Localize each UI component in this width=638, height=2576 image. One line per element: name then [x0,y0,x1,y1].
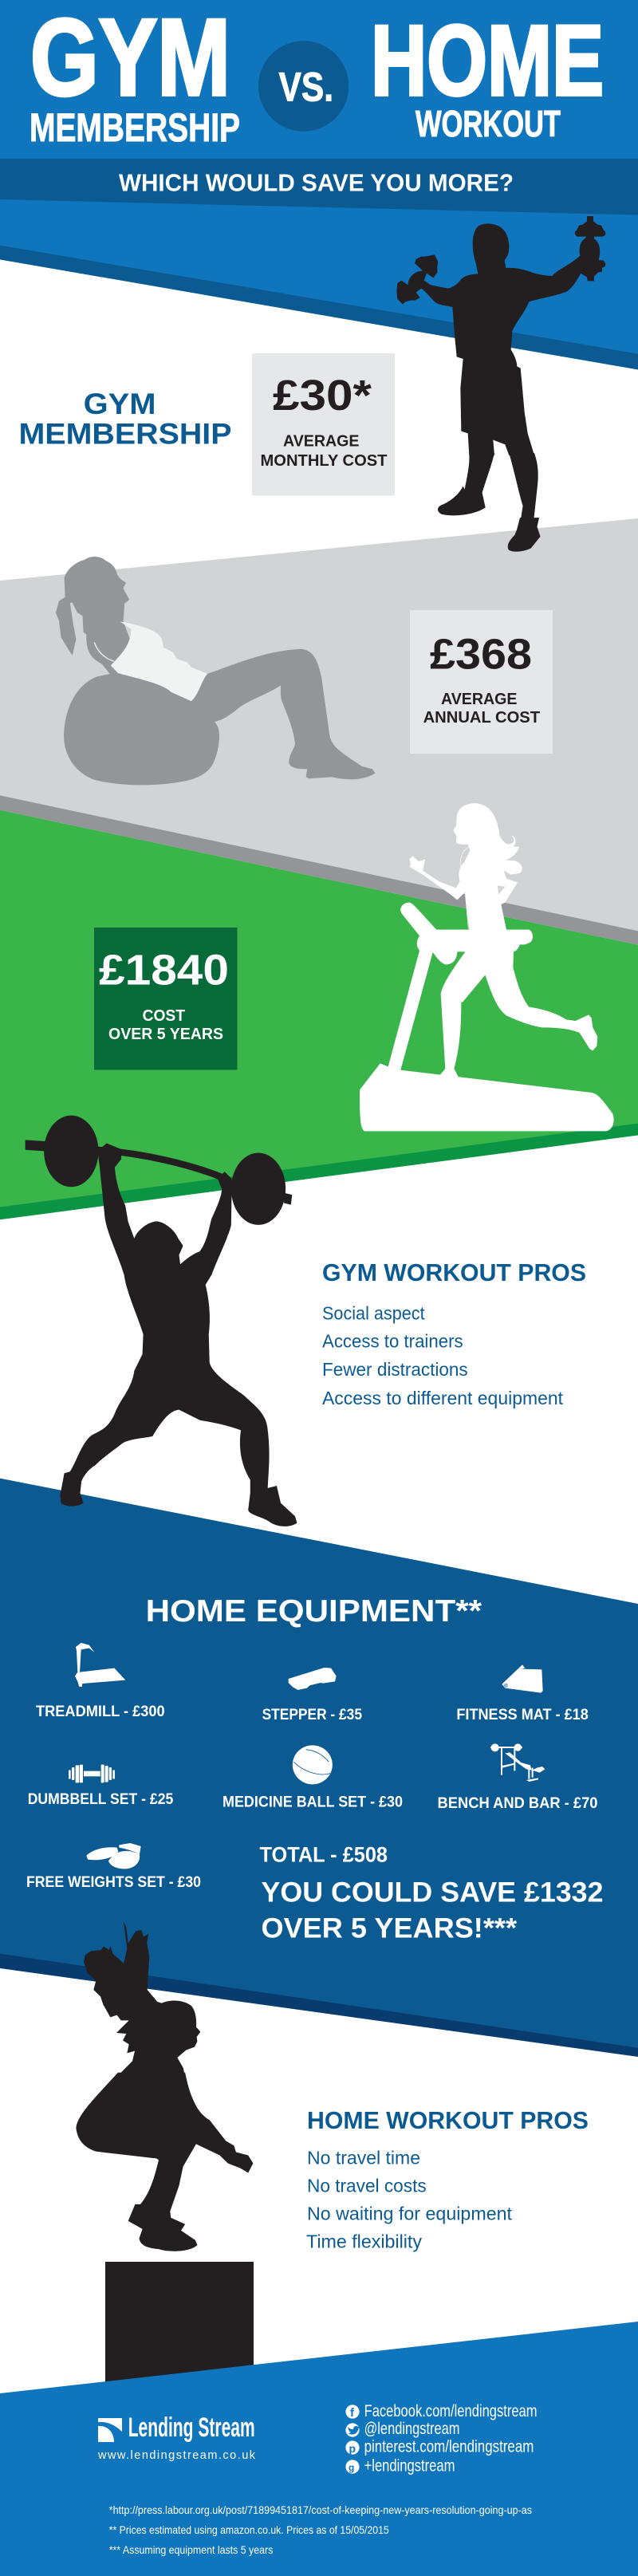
footnotes: *http://press.labour.org.uk/post/71899451817/cost-of-keeping-new-years-resolution-going-up-as [109,2503,532,2516]
heading word: MEMBERSHIP: MEMBERSHIP [30,105,240,150]
text block: home workout pros: Time flexibility [306,2231,423,2252]
logo: Lending Stream: Lending Stream [128,2413,255,2443]
stat box: five year cost [94,928,238,1070]
logo mark [98,2418,122,2442]
silhouette: woman on exercise ball [56,557,375,785]
equipment labels: MEDICINE BALL SET - £30 [223,1794,403,1810]
text block: gym workout pros: Fewer distractions [322,1359,468,1380]
heading: gym membership: MEMBERSHIP [19,416,231,450]
text block: gym workout pros: Social aspect [322,1303,425,1324]
background: navy equipment section [0,1479,638,2057]
logo: Lending Stream: www.lendingstream.co.uk [97,2449,256,2462]
text block: gym workout pros [322,1259,586,1408]
text block: home workout pros: No waiting for equipment [307,2204,513,2224]
icon: medicine ball [293,1745,333,1784]
text block: gym workout pros: GYM WORKOUT PROS [322,1259,586,1286]
jump box [105,2262,254,2389]
heading word: WORKOUT: WORKOUT [415,103,561,144]
heading: home equipment: HOME EQUIPMENT** [146,1594,482,1629]
social: facebook: Facebook.com/lendingstream [364,2402,538,2420]
icon: bench and bar [490,1743,545,1782]
stat box: monthly cost: AVERAGE [283,433,359,451]
icon: free weights set [86,1843,141,1869]
equipment labels [26,1704,598,1891]
equipment labels: STEPPER - £35 [262,1707,362,1723]
social: google plus: +lendingstream [364,2457,455,2476]
logo: Lending Stream [97,2413,256,2462]
heading: gym membership: GYM [84,387,156,420]
stat box: monthly cost: MONTHLY COST [260,452,388,470]
silhouette: man lifting dumbbells [396,216,605,552]
equipment labels: FITNESS MAT - £18 [456,1707,589,1723]
savings callout [260,1843,603,1944]
equipment labels: TREADMILL - £300 [36,1704,165,1720]
background: green section [0,810,638,1219]
social: google plus [345,2457,455,2476]
stat box: five year cost: OVER 5 YEARS [108,1026,223,1043]
background: top blue section [0,0,638,606]
icon: stepper [289,1668,337,1690]
stat box: annual cost: AVERAGE [441,691,517,708]
treadmill frame [360,903,614,1131]
background: grey section [0,518,638,945]
heading word: GYM: GYM [30,0,230,119]
text block: gym workout pros: Access to trainers [322,1331,463,1352]
equipment labels: BENCH AND BAR - £70 [437,1795,598,1812]
social: google plus: g [349,2462,354,2473]
savings callout: OVER 5 YEARS!*** [262,1913,517,1944]
social: facebook: f [350,2406,355,2420]
text block: home workout pros [306,2107,589,2252]
text block: home workout pros: No travel time [307,2148,420,2168]
social links [345,2402,538,2476]
social: twitter: @lendingstream [364,2420,459,2438]
savings callout: YOU COULD SAVE £1332 [262,1877,603,1908]
stat box: annual cost: ANNUAL COST [423,709,540,727]
equipment labels: FREE WEIGHTS SET - £30 [26,1874,201,1891]
footnotes [109,2503,532,2556]
social: pinterest: p [349,2442,356,2455]
text block: gym workout pros: Access to different equipment [322,1388,564,1408]
social: pinterest: pinterest.com/lendingstream [364,2437,534,2456]
icon: treadmill [75,1643,125,1687]
stat box: annual cost [410,610,553,754]
icon: dumbbell set [69,1765,115,1782]
equipment icons [69,1643,545,1869]
silhouette: man lifting barbell [26,1116,297,1526]
savings callout: TOTAL - £508 [260,1843,388,1867]
vs badge [258,41,349,132]
stat box: annual cost: £368 [430,631,532,679]
footnotes: *** Assuming equipment lasts 5 years [109,2543,273,2556]
heading: gym membership [19,387,231,450]
silhouette: woman box jumping [76,1921,253,2251]
vs badge: VS. [279,64,333,110]
stat box: monthly cost [252,353,395,496]
equipment labels: DUMBBELL SET - £25 [28,1791,174,1808]
stat box: five year cost: COST [143,1007,185,1025]
text block: home workout pros: HOME WORKOUT PROS [307,2107,589,2134]
icon: fitness mat [502,1664,543,1693]
social: twitter [345,2420,459,2438]
stat box: five year cost: £1840 [99,947,229,995]
footnotes: ** Prices estimated using amazon.co.uk. Prices as of 15/05/2015 [109,2523,389,2536]
stat box: monthly cost: £30* [273,372,372,419]
footer background [0,2322,638,2576]
subtitle: WHICH WOULD SAVE YOU MORE? [119,169,514,196]
runner body [409,803,597,1077]
heading: GYM MEMBERSHIP [30,0,240,150]
text block: home workout pros: No travel costs [307,2176,427,2196]
silhouette: woman running on treadmill [360,803,614,1131]
heading: HOME WORKOUT [371,6,604,144]
